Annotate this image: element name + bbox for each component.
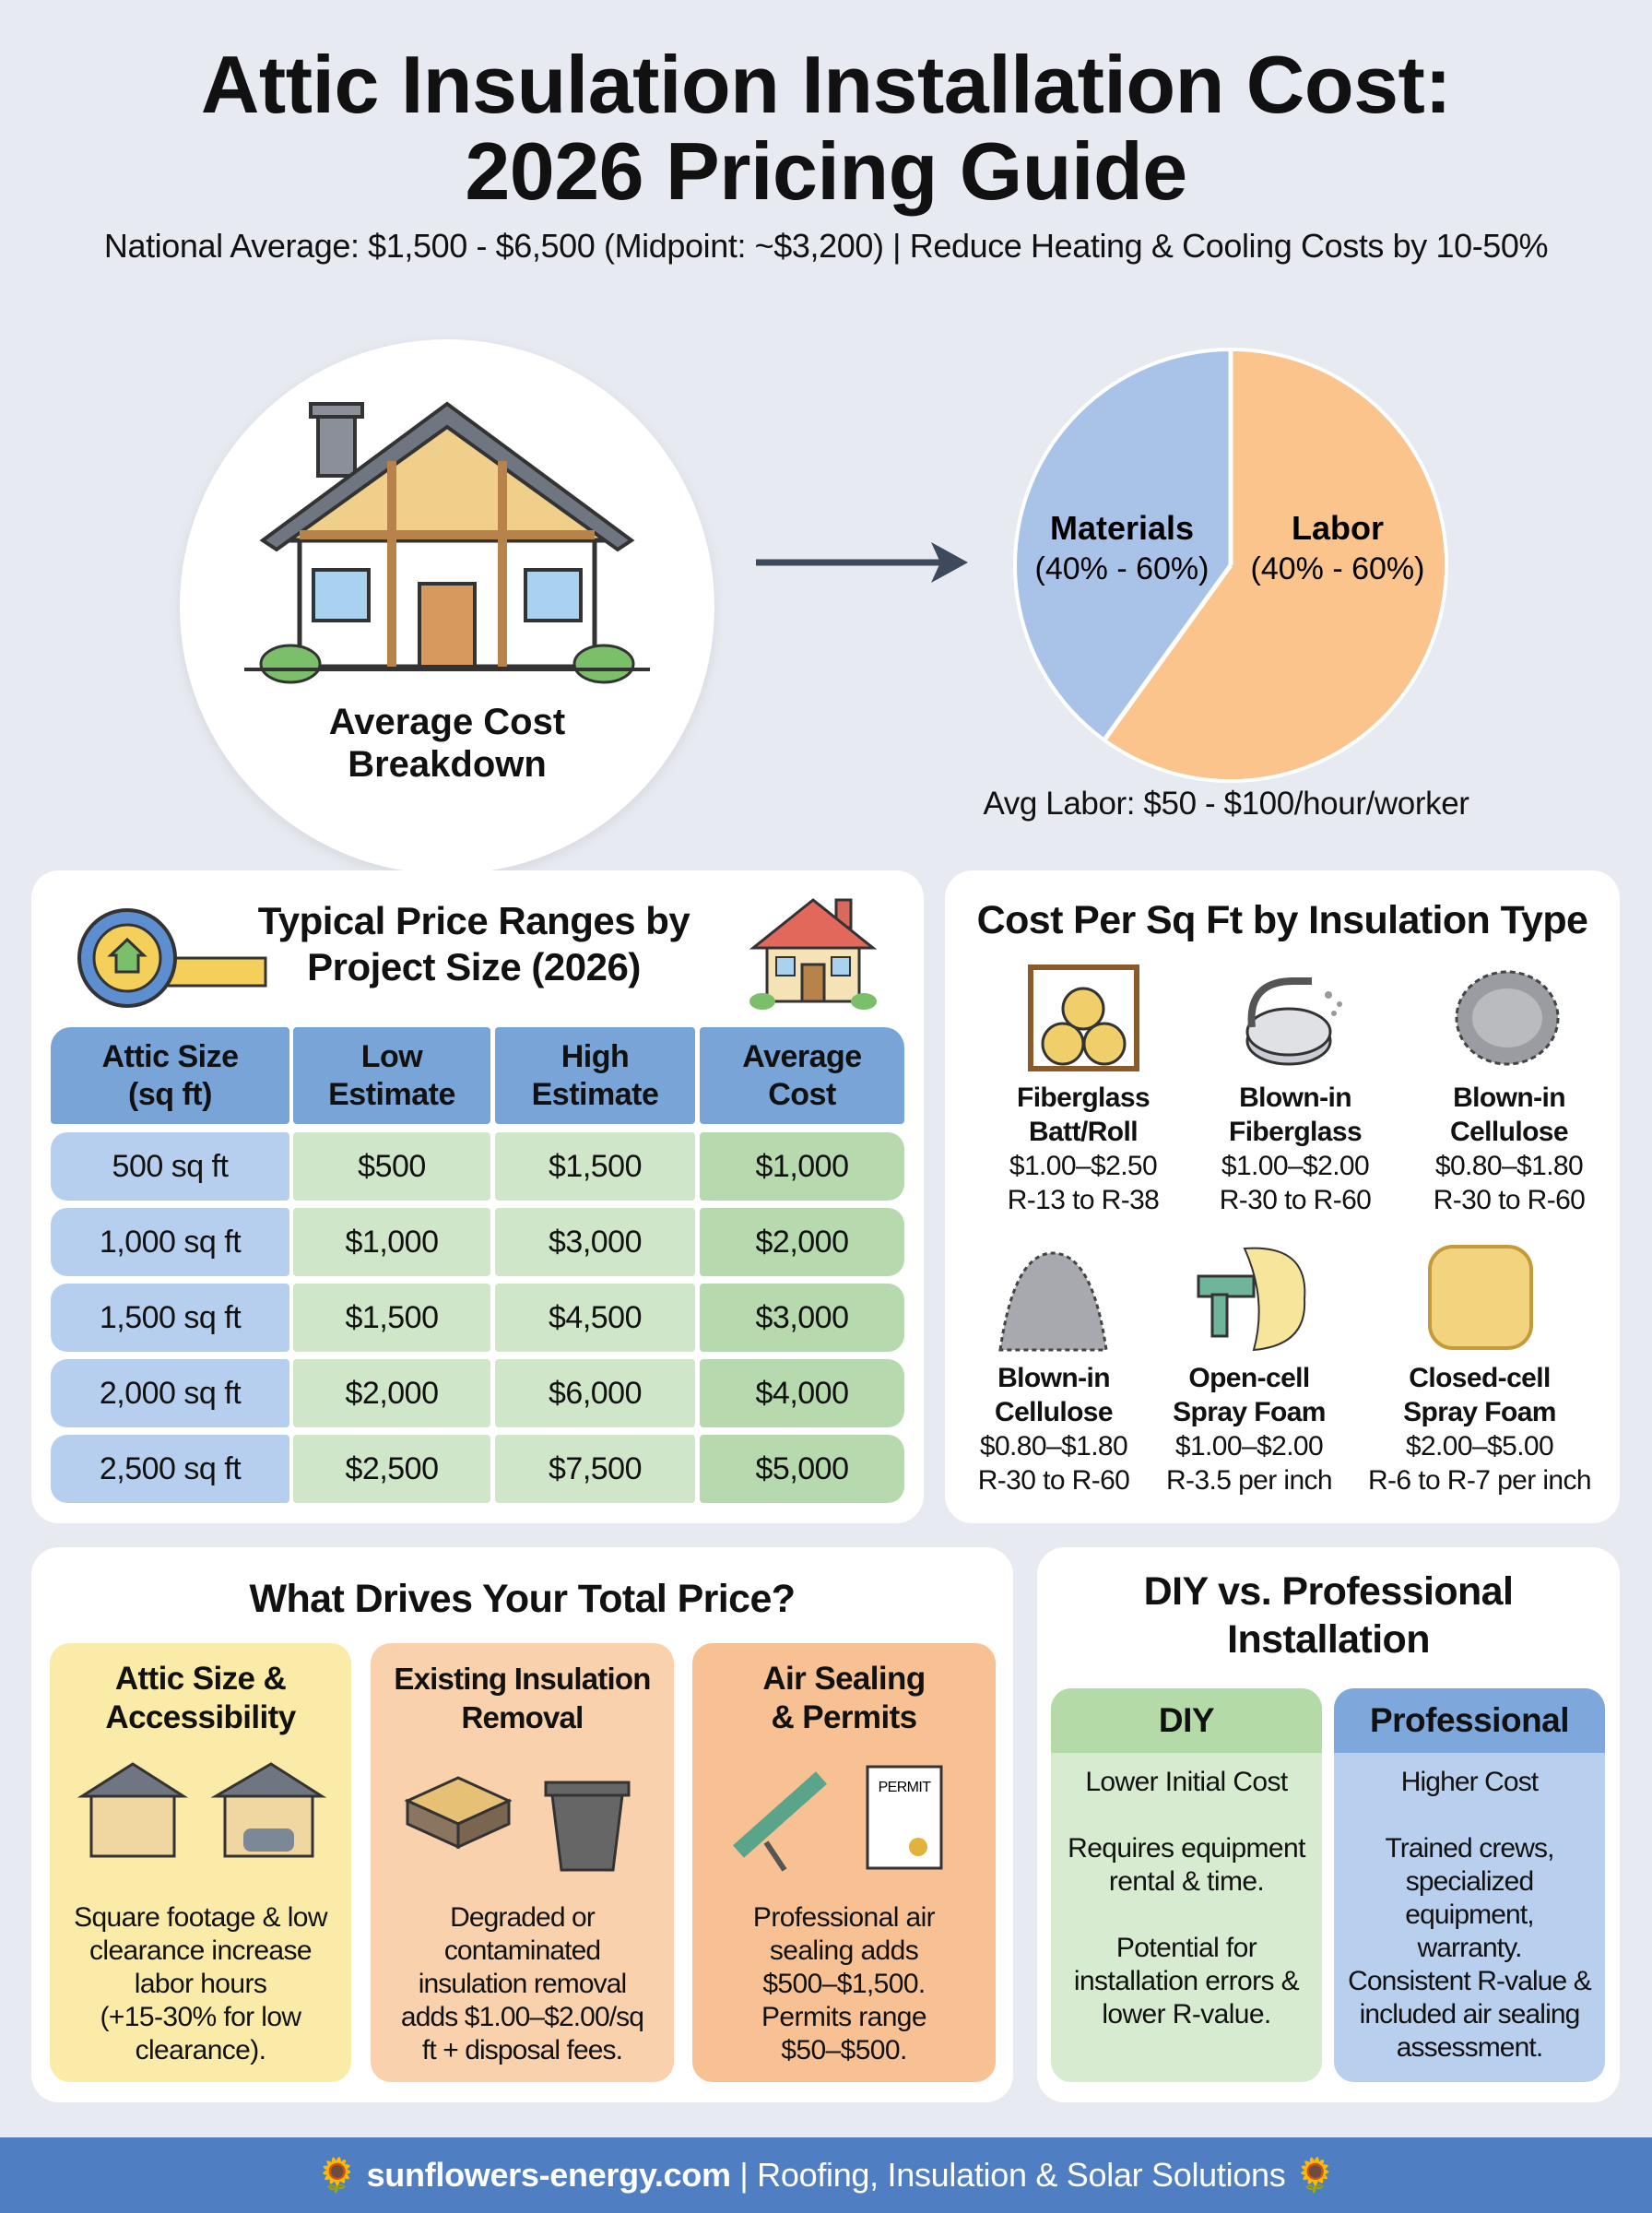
table: $5,000	[756, 1451, 848, 1486]
text: blown cellulose: R-30 to R-60	[1434, 1185, 1585, 1215]
text: cellulose 2: Cellulose	[995, 1397, 1113, 1427]
panel: price ranges table	[31, 870, 924, 1523]
text: cellulose 2: Blown-in	[997, 1363, 1110, 1393]
table: Low	[361, 1039, 422, 1074]
card: air sealing: Professional air	[753, 1902, 935, 1933]
text: cellulose 2: $0.80–$1.80	[980, 1431, 1127, 1462]
table: $1,000	[756, 1149, 848, 1184]
column: Professional: warranty.	[1417, 1933, 1522, 1963]
card: removal: adds $1.00–$2.00/sq	[401, 2002, 643, 2032]
table: $1,000	[345, 1225, 439, 1260]
text: cellulose 2	[978, 1363, 1129, 1496]
text: blown cellulose: $0.80–$1.80	[1435, 1151, 1583, 1181]
table: Cost	[768, 1077, 836, 1112]
text: open cell: Open-cell	[1188, 1363, 1310, 1393]
panel: what drives price	[31, 1547, 1013, 2102]
column: Professional: specialized	[1406, 1866, 1533, 1897]
text: blown fiberglass: Fiberglass	[1229, 1117, 1362, 1147]
card: air sealing: Air Sealing	[762, 1661, 926, 1697]
panel heading: DIY vs. Professional	[1144, 1569, 1513, 1614]
column: DIY: Lower Initial Cost	[1085, 1767, 1288, 1797]
text: blown cellulose: Blown-in	[1453, 1083, 1565, 1113]
text: fiberglass batt	[1008, 1083, 1159, 1215]
icon: small house	[749, 898, 878, 1010]
icon: caulk gun and permit	[733, 1765, 942, 1872]
text: closed cell: Closed-cell	[1409, 1363, 1551, 1393]
card: attic size: clearance increase	[89, 1935, 312, 1966]
text: blown fiberglass: $1.00–$2.00	[1221, 1151, 1369, 1181]
panel heading: What Drives Your Total Price?	[250, 1577, 795, 1621]
arrow	[756, 542, 968, 583]
footer: 🌻 sunflowers-energy.com | Roofing, Insulation & Solar Solutions 🌻	[316, 2156, 1336, 2194]
text: blown fiberglass	[1220, 1083, 1371, 1215]
circle caption	[329, 702, 565, 785]
title: 2026 Pricing Guide	[465, 125, 1187, 217]
pie chart: Labor	[1292, 509, 1384, 547]
text: cellulose 2: R-30 to R-60	[978, 1465, 1129, 1496]
icon: cellulose mound	[998, 1252, 1108, 1352]
text: blown fiberglass: Blown-in	[1239, 1083, 1351, 1113]
circle caption: Breakdown	[348, 744, 547, 785]
title	[201, 39, 1451, 217]
panel heading: Installation	[1227, 1617, 1430, 1662]
icon: attic houses	[77, 1762, 326, 1857]
card: removal: contaminated	[444, 1935, 600, 1966]
table: $3,000	[756, 1300, 848, 1335]
text: closed cell: R-6 to R-7 per inch	[1368, 1465, 1591, 1496]
panel heading: Cost Per Sq Ft by Insulation Type	[977, 898, 1587, 942]
column: Professional: Trained crews,	[1385, 1833, 1554, 1864]
card: attic size: Accessibility	[105, 1699, 296, 1735]
panel: cost per sq ft by type	[945, 870, 1620, 1523]
table: Attic Size	[101, 1039, 239, 1074]
table: (sq ft)	[128, 1077, 212, 1112]
card: attic size	[50, 1643, 351, 2082]
table: 1,000 sq ft	[100, 1225, 241, 1260]
text: blown cellulose	[1434, 1083, 1585, 1215]
panel heading: Typical Price Ranges by	[258, 899, 690, 942]
text: fiberglass batt: Fiberglass	[1017, 1083, 1150, 1113]
text: blown cellulose: Cellulose	[1450, 1117, 1568, 1147]
icon: house	[244, 402, 650, 684]
table	[51, 1027, 904, 1503]
table: $4,500	[549, 1300, 642, 1335]
pie chart	[1013, 348, 1448, 783]
pie chart: Materials	[1050, 509, 1194, 547]
column: Professional: assessment.	[1397, 2032, 1542, 2063]
column: Professional: included air sealing	[1360, 1999, 1579, 2030]
pie chart: (40% - 60%)	[1035, 551, 1209, 586]
card: air sealing	[692, 1643, 996, 2082]
text: closed cell: Spray Foam	[1403, 1397, 1556, 1427]
column: Professional: Higher Cost	[1401, 1767, 1538, 1797]
table: $2,000	[756, 1225, 848, 1260]
card: air sealing: Permits range	[761, 2002, 926, 2032]
table: 2,000 sq ft	[100, 1376, 241, 1411]
card: attic size: Square footage & low	[74, 1902, 327, 1933]
text: fiberglass batt: Batt/Roll	[1029, 1117, 1138, 1147]
footer	[0, 2137, 1652, 2213]
icon: caulk gun and permit: PERMIT	[879, 1780, 931, 1795]
text: closed cell: $2.00–$5.00	[1406, 1431, 1553, 1462]
card: air sealing: & Permits	[771, 1699, 916, 1735]
table: $1,500	[549, 1149, 642, 1184]
card: attic size: Attic Size &	[115, 1661, 286, 1697]
card: removal: ft + disposal fees.	[422, 2035, 622, 2065]
icon: foam block closed cell	[1428, 1245, 1533, 1350]
icon: cellulose pile	[1455, 970, 1560, 1066]
column: Professional: equipment,	[1405, 1899, 1534, 1930]
card: removal	[371, 1643, 674, 2082]
icon: batt rolls	[1028, 964, 1139, 1071]
subtitle: National Average: $1,500 - $6,500 (Midpoint: ~$3,200) | Reduce Heating & Cooling Costs by 10-50%	[104, 227, 1548, 265]
table: 1,500 sq ft	[100, 1300, 241, 1335]
column: Professional	[1334, 1688, 1605, 2082]
card: air sealing: sealing adds	[770, 1935, 918, 1966]
table: High	[561, 1039, 629, 1074]
text: open cell: Spray Foam	[1173, 1397, 1326, 1427]
column: DIY: lower R-value.	[1102, 1999, 1271, 2030]
table: Average	[742, 1039, 862, 1074]
text: open cell: $1.00–$2.00	[1175, 1431, 1323, 1462]
icon: tape measure	[77, 908, 267, 1008]
table: $2,000	[345, 1376, 439, 1411]
panel heading	[258, 899, 690, 988]
icon: insulation block and trash can	[404, 1776, 631, 1872]
icon: spray gun open cell	[1197, 1247, 1305, 1352]
card: attic size: clearance).	[136, 2035, 266, 2065]
table: $3,000	[549, 1225, 642, 1260]
table: $4,000	[756, 1376, 848, 1411]
text: blown fiberglass: R-30 to R-60	[1220, 1185, 1371, 1215]
column: Professional: Professional	[1370, 1701, 1569, 1739]
text: open cell: R-3.5 per inch	[1166, 1465, 1332, 1496]
column: DIY: DIY	[1159, 1701, 1214, 1739]
panel: DIY vs professional	[1037, 1547, 1620, 2102]
table: Estimate	[532, 1077, 658, 1112]
table: $6,000	[549, 1376, 642, 1411]
labor rate note: Avg Labor: $50 - $100/hour/worker	[983, 786, 1469, 822]
table: 500 sq ft	[112, 1149, 228, 1184]
card: removal: Degraded or	[450, 1902, 595, 1933]
column: DIY	[1051, 1688, 1322, 2082]
column: Professional: Consistent R-value &	[1348, 1966, 1591, 1996]
panel heading: Project Size (2026)	[307, 945, 641, 988]
table: Estimate	[328, 1077, 455, 1112]
card: attic size: (+15-30% for low	[100, 2002, 301, 2032]
card: removal: Removal	[462, 1700, 583, 1734]
circle: house illustration	[180, 339, 714, 874]
panel heading	[1144, 1569, 1513, 1662]
text: closed cell	[1368, 1363, 1591, 1496]
card: removal: insulation removal	[419, 1969, 626, 1999]
card: air sealing: $500–$1,500.	[762, 1969, 926, 1999]
column: DIY: Potential for	[1116, 1933, 1257, 1963]
column: DIY: rental & time.	[1109, 1866, 1264, 1897]
column: DIY: installation errors &	[1074, 1966, 1299, 1996]
circle caption: Average Cost	[329, 702, 565, 742]
table: $7,500	[549, 1451, 642, 1486]
column: DIY: Requires equipment	[1068, 1833, 1305, 1864]
card: attic size: labor hours	[135, 1969, 266, 1999]
table: $1,500	[345, 1300, 439, 1335]
text: fiberglass batt: R-13 to R-38	[1008, 1185, 1159, 1215]
text: open cell	[1166, 1363, 1332, 1496]
title: Attic Insulation Installation Cost:	[201, 39, 1451, 130]
table: 2,500 sq ft	[100, 1451, 241, 1486]
table: $2,500	[345, 1451, 439, 1486]
pie chart: (40% - 60%)	[1251, 551, 1424, 586]
card: air sealing: $50–$500.	[781, 2035, 907, 2065]
card: removal: Existing Insulation	[394, 1662, 651, 1696]
text: fiberglass batt: $1.00–$2.50	[1009, 1151, 1157, 1181]
table: $500	[358, 1149, 426, 1184]
icon: blown fiberglass hose	[1246, 977, 1342, 1066]
